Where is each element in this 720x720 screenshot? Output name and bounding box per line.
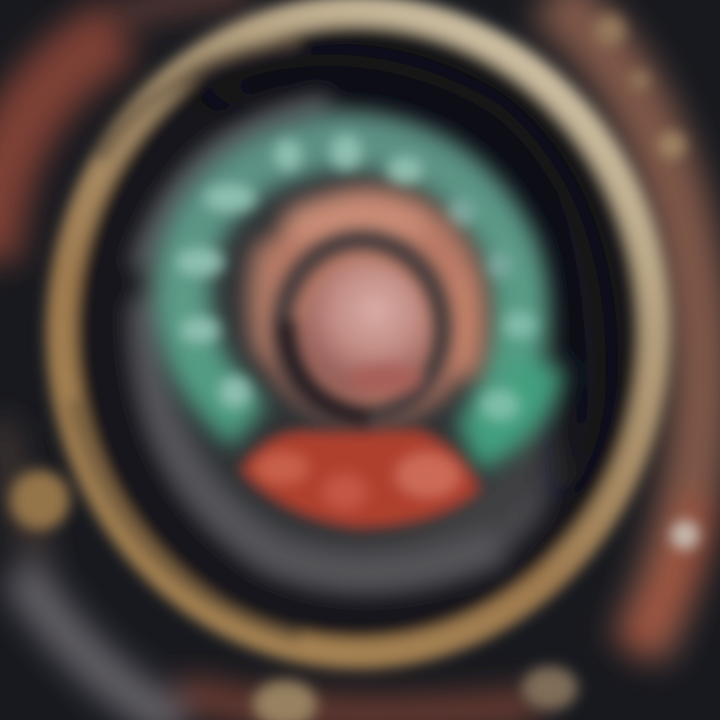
green dial ring <box>183 140 540 450</box>
gold ring <box>61 10 655 654</box>
pink centre <box>303 262 427 398</box>
gray top arc <box>140 105 330 270</box>
red lower band <box>240 430 480 528</box>
salmon ring <box>248 187 486 423</box>
gray ring <box>132 109 588 581</box>
green dial highlights <box>176 134 537 421</box>
dark centre ring <box>282 240 442 418</box>
dark well crescent at top right <box>190 54 606 510</box>
